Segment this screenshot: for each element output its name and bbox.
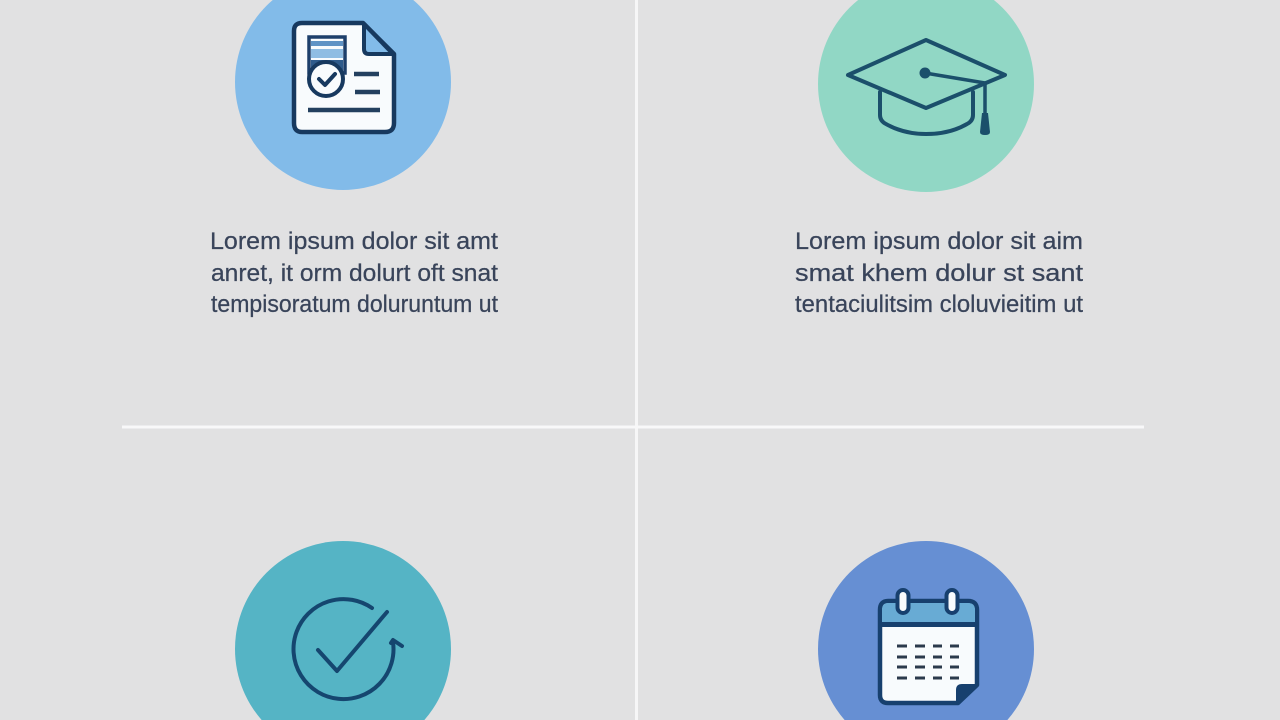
text block: graduation [795, 228, 1083, 318]
icon: document with check badge [294, 23, 394, 132]
icon circle: mint [818, 0, 1034, 192]
icon circle: light blue [235, 0, 451, 190]
icon circle: teal [235, 541, 451, 720]
panel: graduation item [795, 0, 1083, 318]
icon: calendar [880, 590, 977, 703]
icon: graduation cap [848, 40, 1005, 135]
icon: circular check mark [294, 599, 402, 699]
text block: graduation: smat khem dolur st sant [795, 260, 1083, 287]
text block: document: Lorem ipsum dolor sit amt [210, 228, 498, 255]
icon circle: periwinkle blue [818, 541, 1034, 720]
text block: graduation: Lorem ipsum dolor sit aim [795, 228, 1083, 255]
panel: calendar item [818, 541, 1034, 720]
text block: document: tempisoratum doluruntum ut [211, 291, 498, 318]
text block: document [210, 228, 498, 318]
text block: document: anret, it orm dolurt oft snat [211, 260, 498, 287]
text block: graduation: tentaciulitsim cloluvieitim ut [795, 291, 1083, 318]
panel: document item [210, 0, 498, 318]
panel: check item [235, 541, 451, 720]
